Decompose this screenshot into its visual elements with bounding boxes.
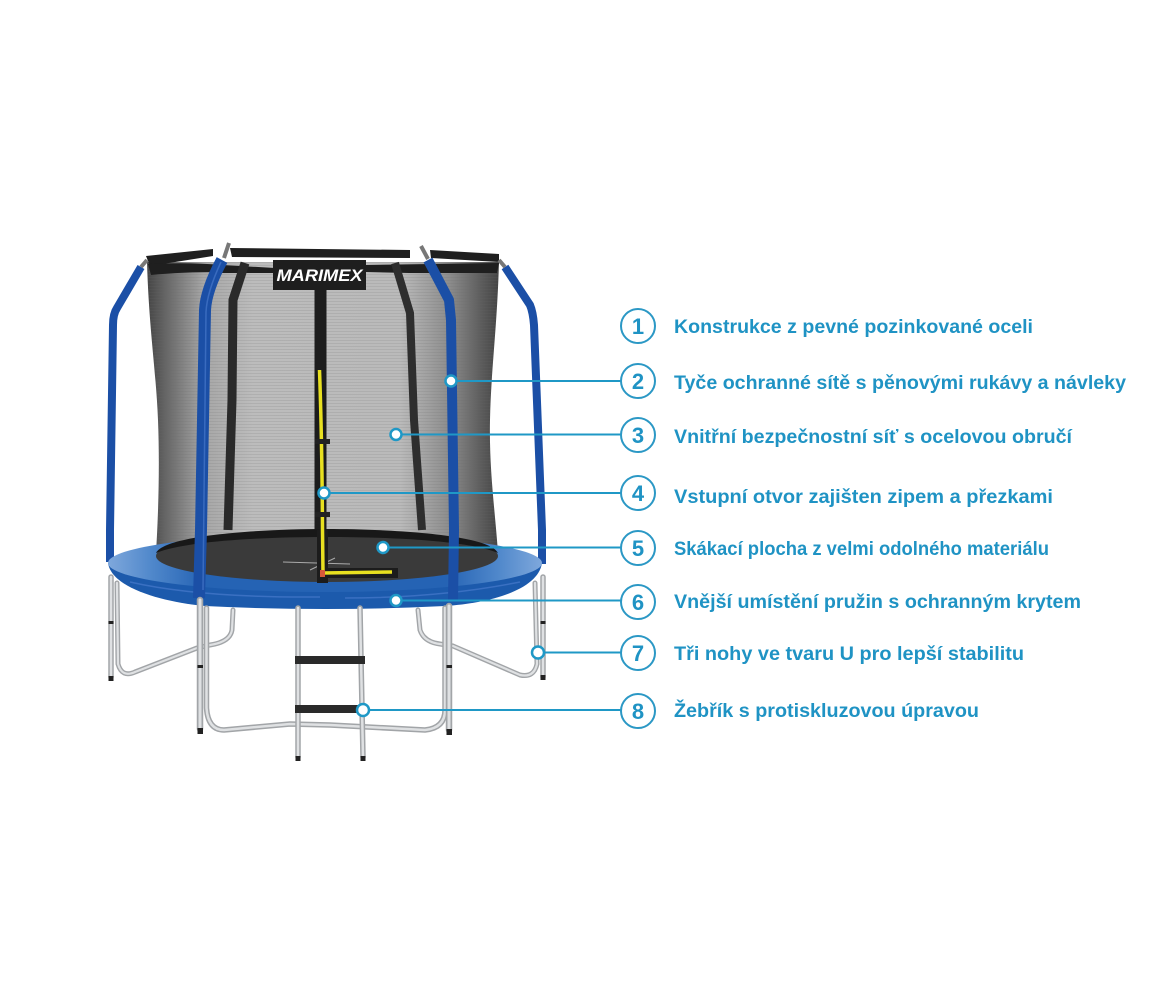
callout 7: 7	[632, 641, 644, 666]
callout 1: Konstrukce z pevné pozinkované oceli	[674, 317, 1033, 338]
front U-shaped leg	[198, 600, 452, 735]
callout 8: Žebřík s protiskluzovou úpravou	[674, 700, 979, 722]
callout 5	[378, 531, 1049, 565]
callout 3: Vnitřní bezpečnostní síť s ocelovou obručí	[674, 427, 1073, 448]
callout 3: 3	[632, 423, 644, 448]
top hoop	[146, 248, 499, 275]
callout 4: Vstupní otvor zajišten zipem a přezkami	[674, 487, 1053, 508]
callout 4	[318, 476, 1053, 510]
callout 7: Tři nohy ve tvaru U pro lepší stabilitu	[674, 644, 1024, 665]
brand label: MARIMEX	[276, 266, 364, 285]
rear U-shaped legs	[108, 577, 546, 681]
callout 8	[357, 694, 979, 728]
callout 5: 5	[632, 536, 644, 561]
jump mat	[108, 529, 542, 609]
brand label	[273, 260, 366, 290]
callout 2: 2	[632, 369, 644, 394]
trampoline illustration	[108, 243, 546, 761]
ladder	[295, 608, 366, 761]
rear net poles with foam sleeves	[110, 267, 542, 564]
zipper entrance	[314, 290, 326, 530]
safety net	[146, 248, 499, 553]
net straps	[228, 263, 245, 530]
callout 6	[390, 585, 1081, 619]
front net poles with foam sleeves	[141, 243, 505, 600]
callout 3	[390, 418, 1073, 452]
callout 2	[446, 364, 1126, 398]
callout 5: Skákací plocha z velmi odolného materiálu	[674, 539, 1049, 560]
zipper and buckles	[315, 370, 392, 577]
callout 6: 6	[632, 590, 644, 615]
callout 1	[621, 309, 1033, 343]
callout 8: 8	[632, 699, 644, 724]
callout 4: 4	[632, 481, 645, 506]
callout 2: Tyče ochranné sítě s pěnovými rukávy a návleky	[674, 373, 1126, 394]
callout 1: 1	[632, 314, 644, 339]
callout 7	[532, 636, 1024, 670]
callout 6: Vnější umístění pružin s ochranným krytem	[674, 592, 1081, 613]
